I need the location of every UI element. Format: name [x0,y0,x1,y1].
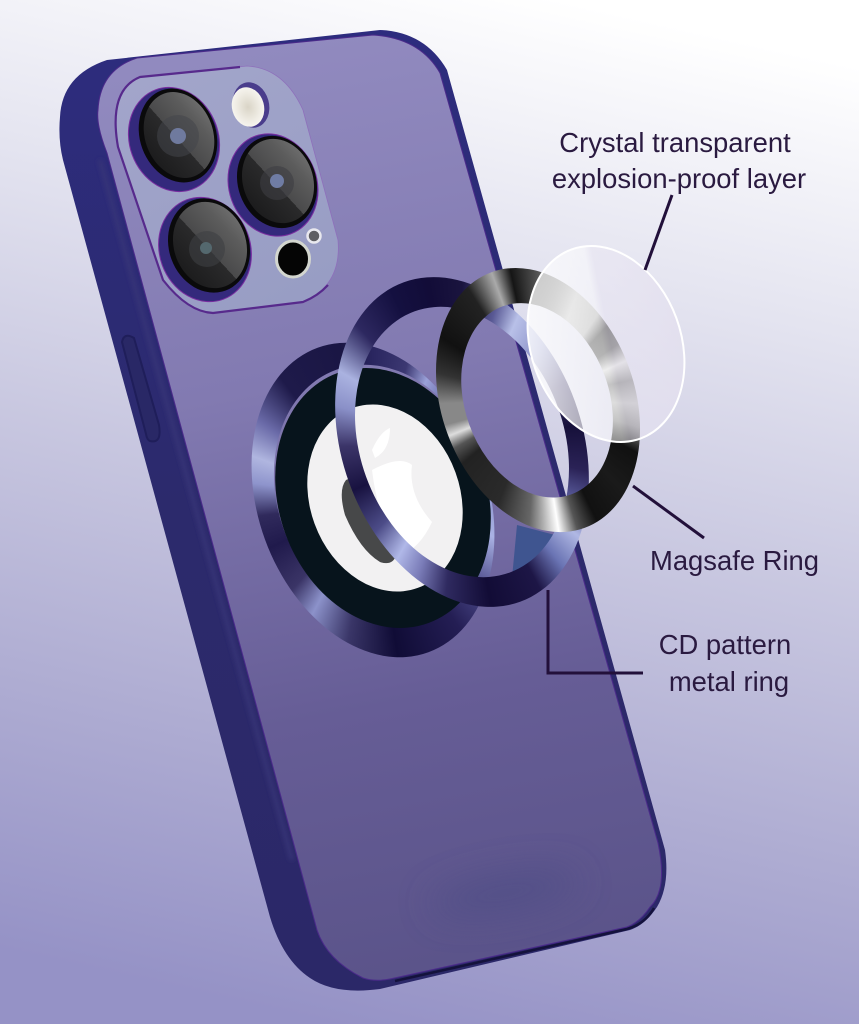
label: crystal transparent explosion-proof layer: Crystal transparent [559,127,791,158]
black inner disc [240,337,526,659]
label: crystal transparent explosion-proof layer: explosion-proof layer [552,163,806,194]
magnetic disc on phone [252,342,494,658]
side wall light strip [100,160,292,860]
label: CD pattern metal ring: CD pattern [659,629,791,660]
label: crystal transparent explosion-proof layer [552,127,806,194]
soft reflection on back [428,864,582,922]
apple logo highlight [372,428,432,556]
leader line: metal ring [548,590,643,673]
case back face [98,35,662,980]
leader line: magsafe ring [633,486,704,538]
leader line: crystal layer [645,195,672,270]
crystal transparent glass layer [501,224,711,464]
microphone [308,230,320,242]
bottom dark edge [395,908,654,981]
lens bottom left [144,184,266,315]
lens right [214,121,332,249]
lens top left [114,74,234,205]
island lower rim [116,67,328,313]
CD ring on case [252,342,494,658]
camera island [114,66,338,315]
label: CD pattern metal ring [659,629,791,697]
label: CD pattern metal ring: metal ring [669,666,789,697]
CD pattern metal ring [335,277,589,607]
label: magsafe ring: Magsafe Ring [650,545,819,576]
phone case body [59,30,666,991]
Magsafe ring [436,268,640,532]
dark slot [342,479,396,563]
case side wall [59,30,666,991]
flash [227,78,274,132]
white centre disc [282,382,488,614]
side button [122,336,160,441]
island plate [116,66,338,313]
lidar sensor [276,241,310,277]
blue tint patch [512,525,578,578]
